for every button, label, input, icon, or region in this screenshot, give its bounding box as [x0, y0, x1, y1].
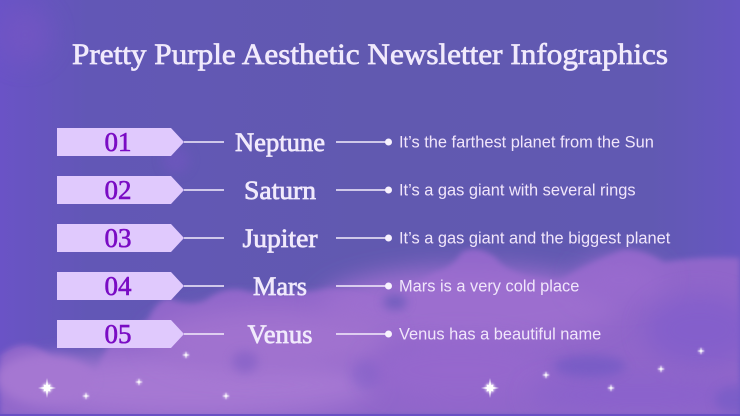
connector: [336, 186, 392, 194]
connector: [336, 138, 392, 146]
number tag 05: [57, 319, 184, 349]
connector: [336, 330, 392, 338]
planet name: Saturn: [244, 176, 316, 205]
number tag 02: 02: [104, 175, 132, 205]
planet name: Venus: [248, 320, 312, 349]
row 2: Saturn: [57, 175, 636, 205]
description: It’s a gas giant with several rings: [399, 182, 636, 200]
clouds: [0, 249, 740, 416]
number tag 05: 05: [104, 319, 132, 349]
description: Venus has a beautiful name: [399, 326, 601, 344]
connector: [336, 234, 392, 242]
number tag 03: [57, 223, 184, 253]
number tag 04: [57, 271, 184, 301]
number tag 02: [57, 175, 184, 205]
planet name: Neptune: [235, 128, 325, 157]
number tag 04: 04: [104, 271, 132, 301]
number tag 03: 03: [104, 223, 132, 253]
title: Pretty Purple Aesthetic Newsletter Infographics: [72, 38, 668, 71]
stars: [38, 347, 705, 400]
row 4: Mars: [57, 271, 579, 301]
row 3: Jupiter: [57, 223, 671, 253]
number tag 01: [57, 127, 184, 157]
description: It’s the farthest planet from the Sun: [399, 134, 654, 152]
planet name: Mars: [253, 272, 307, 301]
row 5: Venus: [57, 319, 601, 349]
description: It’s a gas giant and the biggest planet: [399, 230, 671, 248]
description: Mars is a very cold place: [399, 278, 579, 296]
connector: [336, 282, 392, 290]
planet name: Jupiter: [242, 224, 318, 253]
row 1: Neptune: [57, 127, 654, 157]
number tag 01: 01: [104, 127, 132, 157]
